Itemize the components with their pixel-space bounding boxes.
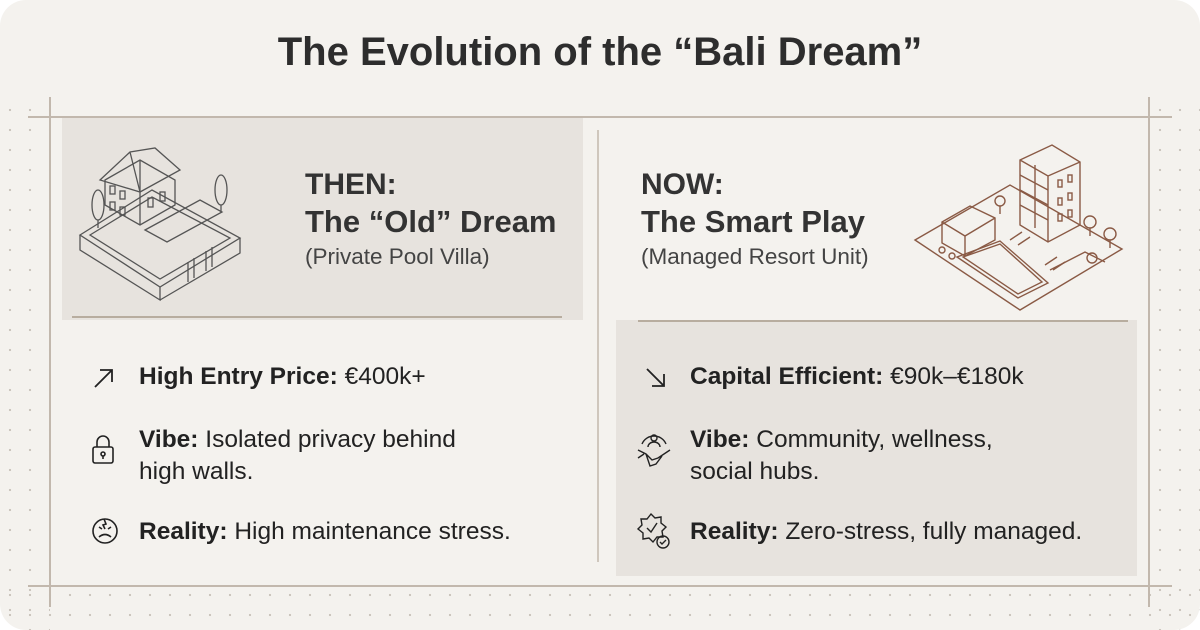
row: price: High Entry Price: €400k+	[139, 363, 426, 390]
row: vibe: social hubs.	[690, 458, 819, 485]
icon: down arrow	[646, 368, 665, 387]
icon: gear check	[637, 513, 670, 549]
text: then heading	[305, 168, 556, 269]
text: now heading	[641, 168, 869, 269]
row: vibe: Vibe: Community, wellness,	[690, 426, 993, 453]
icon: resort illustration	[914, 144, 1124, 311]
row: vibe	[690, 426, 993, 485]
list: now	[637, 363, 1082, 549]
panel: then header: THEN:	[305, 168, 397, 201]
icon: stressed face	[92, 518, 118, 544]
title: The Evolution of the “Bali Dream”	[278, 30, 922, 74]
row: vibe: high walls.	[139, 458, 253, 485]
row: capital: Capital Efficient: €90k–€180k	[690, 363, 1024, 390]
icon: lock	[92, 435, 114, 464]
row: vibe	[139, 426, 456, 485]
icon: community handshake	[638, 434, 670, 467]
panel: then header: The “Old” Dream	[305, 204, 556, 239]
text: now heading: NOW:	[641, 168, 724, 201]
text: now heading: (Managed Resort Unit)	[641, 244, 869, 269]
icon: up arrow	[94, 369, 113, 388]
list: then	[92, 363, 511, 545]
row: reality: Reality: Zero-stress, fully managed.	[690, 518, 1082, 545]
text: now heading: The Smart Play	[641, 204, 865, 239]
panel: now list background	[616, 320, 1137, 576]
panel: then header: (Private Pool Villa)	[305, 244, 490, 269]
panel: then header	[62, 118, 583, 320]
row: vibe: Vibe: Isolated privacy behind	[139, 426, 456, 453]
row: reality: Reality: High maintenance stress.	[139, 518, 511, 545]
icon: villa illustration	[78, 147, 242, 301]
